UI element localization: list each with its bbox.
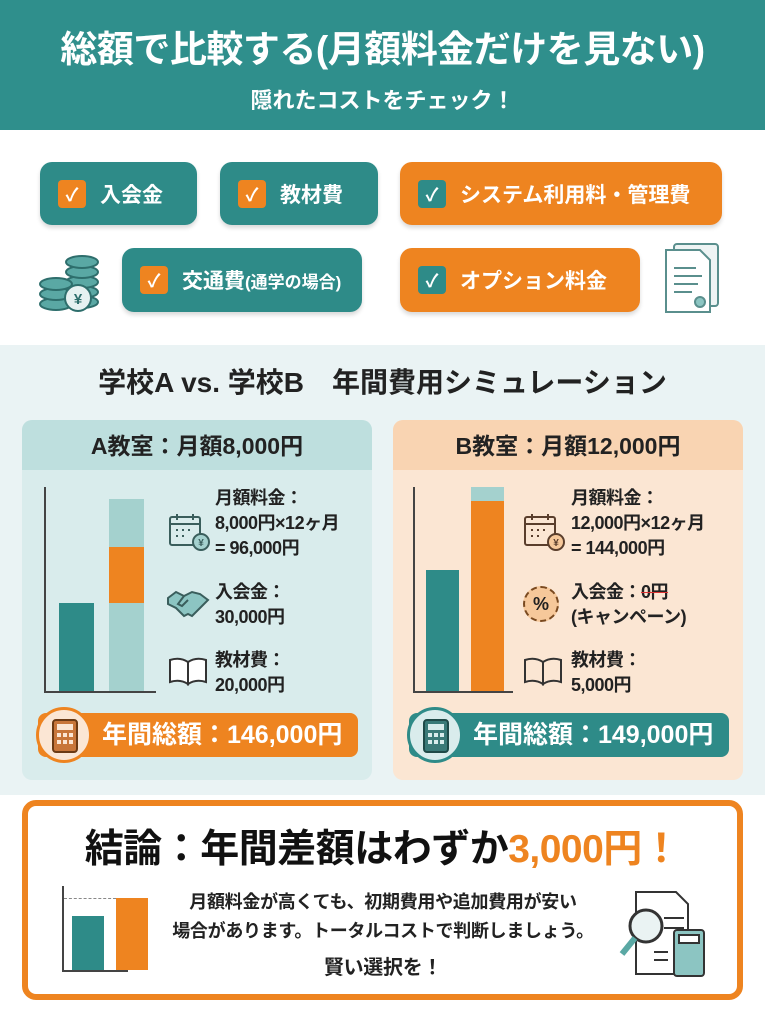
subtitle: 隠れたコストをチェック！ (250, 88, 514, 113)
panel A header: A教室：月額8,000円 (91, 433, 303, 459)
text: 月額料金 (215, 488, 339, 558)
panel: A教室 (22, 420, 372, 780)
panel: B教室 (393, 420, 743, 780)
total B (409, 713, 729, 757)
bar chart A (44, 487, 156, 693)
pill: オプション料金: オプション料金 (460, 270, 607, 293)
icon: calendar (169, 514, 210, 551)
pill: オプション料金 (400, 248, 640, 312)
conclusion text: 月額料金が高くても、初期費用や追加費用が安い (189, 892, 577, 912)
pill: システム利用料 (400, 162, 722, 225)
pill: オプション料金: ✓ (425, 271, 438, 291)
icon: calendar: ¥ (198, 538, 204, 549)
cost checklist panel (0, 130, 765, 345)
text: 月額料金: 8,000円×12ヶ月 (215, 513, 339, 533)
pill: 教材費: 教材費 (280, 184, 343, 206)
total A: 年間総額：146,000円 (102, 721, 342, 749)
text: 入会金: 30,000円 (215, 607, 285, 627)
conclusion text: 場合があります。トータルコストで判断しましょう。 (172, 921, 594, 941)
total A (38, 713, 358, 757)
icon: coins (39, 255, 99, 312)
text: 教材費 (215, 650, 285, 695)
mini bar chart (62, 886, 128, 972)
pill: システム利用料: ✓ (425, 184, 438, 204)
pill: 入会金: ✓ (65, 184, 78, 204)
panel B header (393, 420, 743, 470)
icon: handshake (167, 590, 210, 618)
text: 入会金 (215, 582, 285, 627)
text: 月額料金 B: = 144,000円 (571, 538, 665, 558)
pill: 交通費: 交通費 (182, 270, 245, 293)
icon: calendar B: ¥ (553, 538, 559, 549)
text: 月額料金: 月額料金： (215, 488, 302, 508)
text: 入会金 B (571, 582, 686, 627)
icon: magnifier and calculator (620, 891, 705, 977)
header banner (0, 0, 765, 130)
text: 教材費 B (571, 650, 641, 695)
panel A header (22, 420, 372, 470)
text: 月額料金 B: 12,000円×12ヶ月 (571, 513, 705, 533)
icon: discount badge: % (533, 594, 549, 614)
conclusion text (172, 892, 594, 979)
text: 教材費 B: 教材費： (571, 650, 641, 670)
icon: book (169, 658, 207, 686)
title: 総額で比較する(月額料金だけを見ない) (60, 29, 705, 70)
text: 月額料金 B: 月額料金： (571, 488, 658, 508)
conclusion heading: 結論：年間差額はわずか3,000円！ (85, 828, 680, 871)
icon: calendar B (524, 514, 565, 551)
pill: 教材費 (220, 162, 378, 225)
icon: discount badge (523, 586, 559, 622)
panel B header: B教室：月額12,000円 (456, 433, 680, 459)
text: 教材費: 20,000円 (215, 675, 285, 695)
pill: 交通費 (122, 248, 362, 312)
conclusion text: 賢い選択を！ (324, 957, 442, 979)
pill: 入会金: 入会金 (100, 184, 163, 206)
icon: document (665, 243, 719, 313)
icon: book B (524, 658, 562, 686)
total B: 年間総額：149,000円 (473, 721, 713, 749)
comparison section (0, 345, 765, 795)
text: 月額料金 B (571, 488, 705, 558)
icon: coins: ¥ (74, 291, 83, 308)
text: 月額料金: = 96,000円 (215, 538, 299, 558)
pill: 交通費: (通学の場合) (245, 272, 341, 292)
section heading: 学校A vs. 学校B 年間費用シミュレーション (98, 367, 667, 398)
text: 教材費: 教材費： (215, 650, 285, 670)
pill: システム利用料: システム利用料・管理費 (460, 184, 690, 206)
text: 入会金: 入会金： (215, 582, 285, 602)
pill: 入会金 (40, 162, 197, 225)
bar chart B (413, 487, 513, 693)
pill: 教材費: ✓ (245, 184, 258, 204)
text: 教材費 B: 5,000円 (571, 675, 631, 695)
conclusion box (22, 800, 743, 1000)
text: 入会金 B: (キャンペーン) (571, 607, 686, 627)
text: 入会金 B: 入会金：0円 (571, 582, 668, 602)
pill: 交通費: ✓ (147, 271, 160, 291)
